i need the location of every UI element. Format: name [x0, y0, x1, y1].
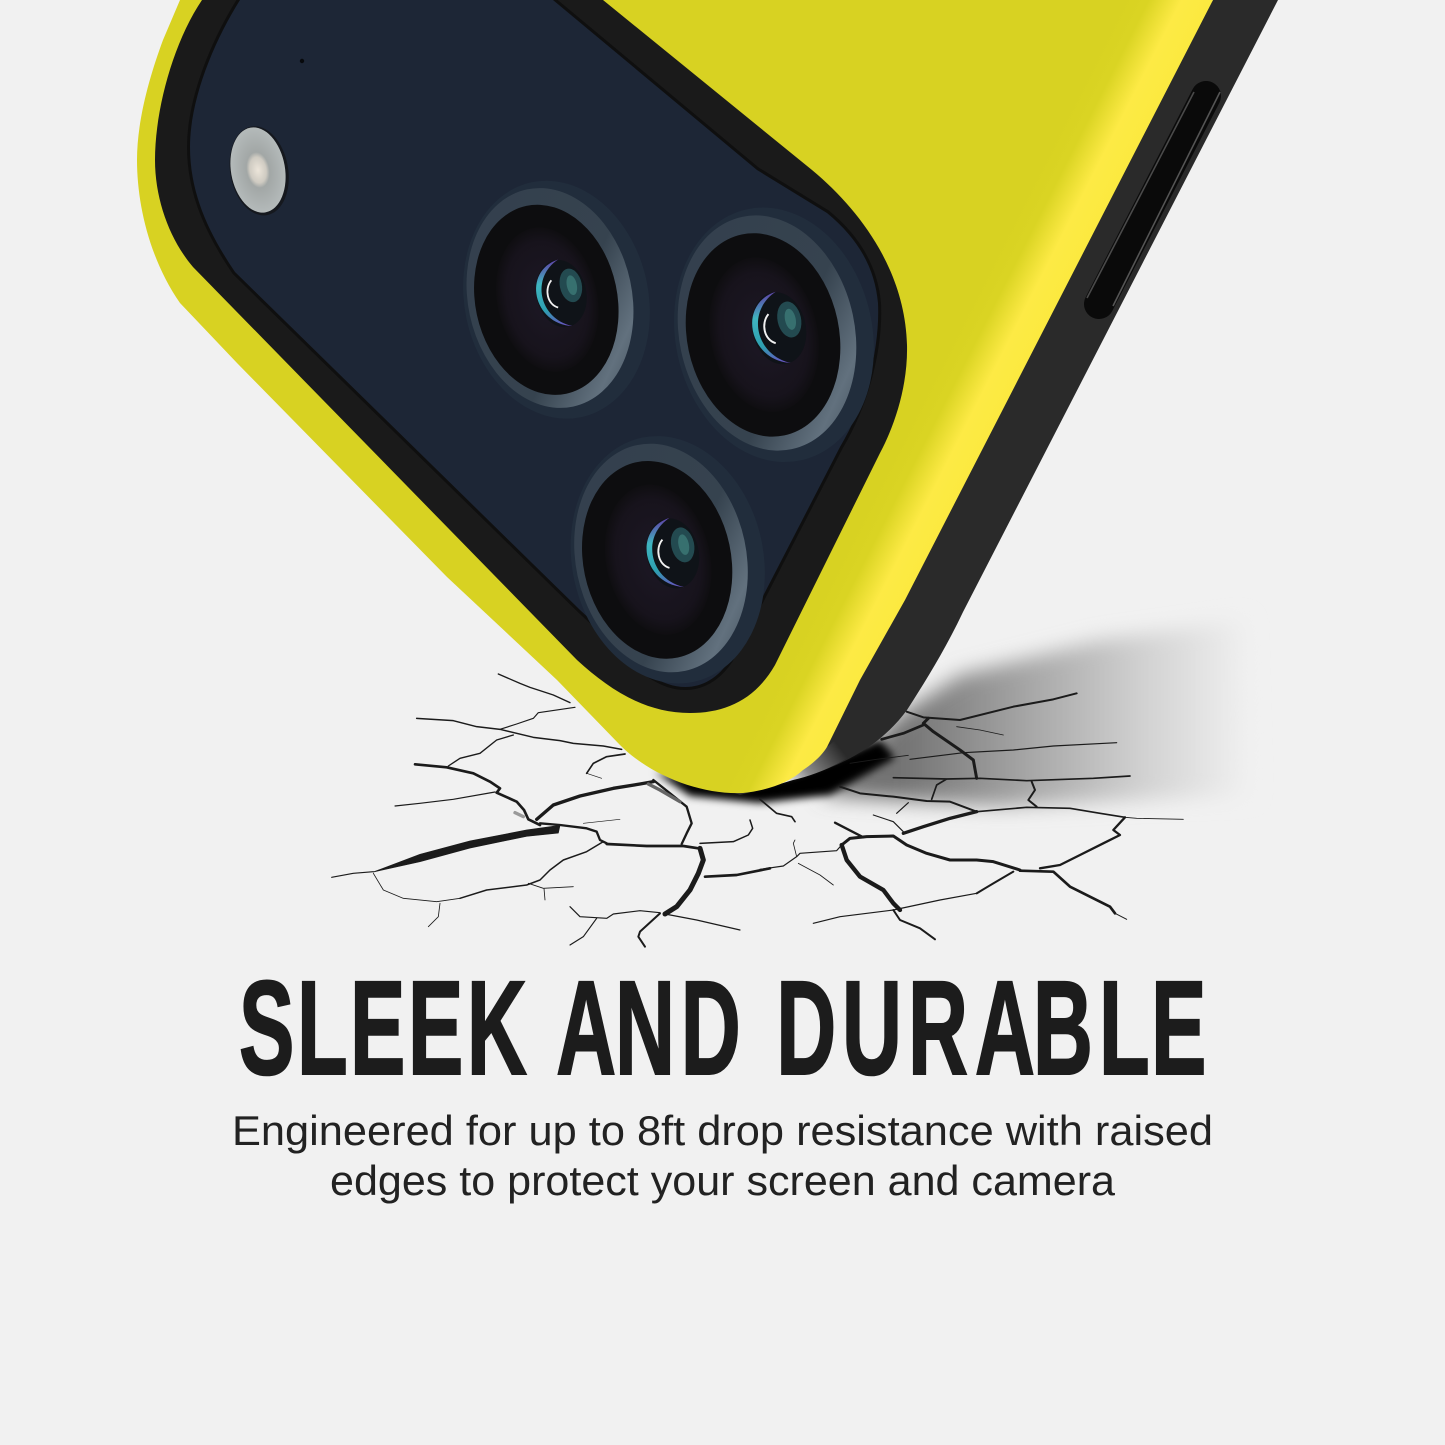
camera lens: right: [651, 189, 897, 481]
camera lens: top left: [442, 163, 671, 436]
camera gasket (black): [155, 0, 907, 713]
microphone dot: [300, 59, 304, 63]
cracks: left cluster: [332, 674, 770, 947]
camera plate (navy): [190, 0, 878, 687]
yellow case back: [137, 0, 1213, 793]
side wall highlight: [760, 738, 862, 790]
camera lens: bottom: [548, 418, 787, 702]
cast shadow of phone: [655, 620, 1250, 806]
ground cracks: [332, 674, 1183, 947]
subtitle line 1: Engineered for up to 8ft drop resistance with raised: [232, 1107, 1213, 1154]
side button: [1087, 92, 1220, 306]
subtitle line 2: edges to protect your screen and camera: [330, 1157, 1116, 1204]
phone in yellow case: [137, 0, 1278, 795]
flash: [223, 121, 296, 220]
plate edge shadow line: [190, 0, 878, 687]
subtitle: [232, 1107, 1213, 1204]
case side wall (black): [700, 0, 1278, 795]
cracks: right cluster: [760, 693, 1183, 939]
title: SLEEK AND DURABLE: [239, 953, 1206, 1103]
